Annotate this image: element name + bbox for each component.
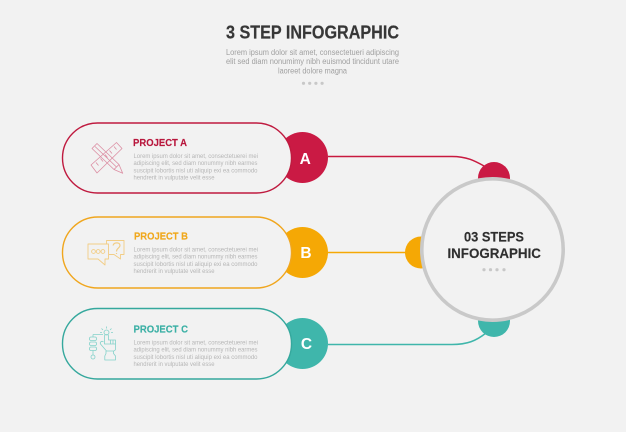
- badge A: [277, 132, 328, 183]
- project C text: adipiscing elit, sed diam nonummy nibh earmes: [134, 347, 258, 354]
- connector A: [328, 156, 484, 166]
- badge B: [277, 227, 328, 278]
- project C text: suscipit lobortis nisl uti aliquip exi ea commodo: [134, 354, 258, 361]
- project A text: Lorem ipsum dolor sit amet, consectetuerei mei: [134, 153, 258, 160]
- project B text: hendrerit in vulputate velit esse: [134, 268, 215, 275]
- central label: 03 STEPS: [464, 229, 524, 245]
- project B text: Lorem ipsum dolor sit amet, consectetuerei mei: [134, 246, 258, 254]
- icon: speech bubbles: [88, 240, 124, 265]
- icon: robot hand and flowchart: [90, 326, 116, 360]
- subtitle text: [226, 48, 400, 75]
- project C text: [134, 340, 258, 368]
- project B text: [134, 246, 258, 275]
- pill C: [62, 308, 292, 379]
- project C text: Lorem ipsum dolor sit amet, consectetuerei mei: [134, 340, 258, 346]
- node circle C: [478, 305, 510, 337]
- project A text: adipiscing elit, sed diam nonummy nibh earmes: [134, 160, 258, 167]
- panel: project B: [62, 217, 328, 288]
- central label: INFOGRAPHIC: [447, 245, 541, 261]
- project A text: [134, 153, 258, 182]
- project A text: suscipit lobortis nisl uti aliquip exi ea commodo: [134, 167, 258, 174]
- central dots: [482, 268, 506, 271]
- panel: project A: [62, 123, 328, 193]
- header dots: [302, 82, 324, 85]
- subtitle text: laoreet dolore magna: [278, 66, 347, 75]
- badge letter A: A: [300, 151, 311, 168]
- pill B: [62, 217, 292, 288]
- icon: crossed ruler and pencil: [91, 142, 123, 173]
- node circle B: [405, 236, 437, 268]
- title: 3 STEP INFOGRAPHIC: [226, 22, 399, 42]
- node circle A: [478, 162, 510, 194]
- badge C: [277, 318, 328, 369]
- badge letter C: C: [301, 336, 312, 353]
- project C heading: PROJECT C: [134, 324, 188, 336]
- badge letter B: B: [300, 245, 312, 262]
- project B text: adipiscing elit, sed diam nonummy nibh earmes: [134, 254, 258, 261]
- project A text: hendrerit in vulputate velit esse: [134, 175, 215, 182]
- connector C: [328, 333, 486, 344]
- panel: project C: [62, 308, 328, 379]
- subtitle text: Lorem ipsum dolor sit amet, consectetueri adipiscing: [226, 48, 399, 57]
- project C text: hendrerit in vulputate velit esse: [134, 361, 215, 368]
- pill A: [62, 123, 292, 193]
- project A heading: PROJECT A: [133, 137, 187, 149]
- project B heading: PROJECT B: [134, 230, 188, 242]
- connector B: [328, 252, 406, 254]
- subtitle text: elit sed diam nonumimy nibh euismod tincidunt utare: [226, 57, 400, 66]
- central label: [447, 229, 541, 261]
- project B text: suscipit lobortis nisl uti aliquip exi ea commodo: [134, 261, 258, 268]
- central circle: [422, 179, 563, 320]
